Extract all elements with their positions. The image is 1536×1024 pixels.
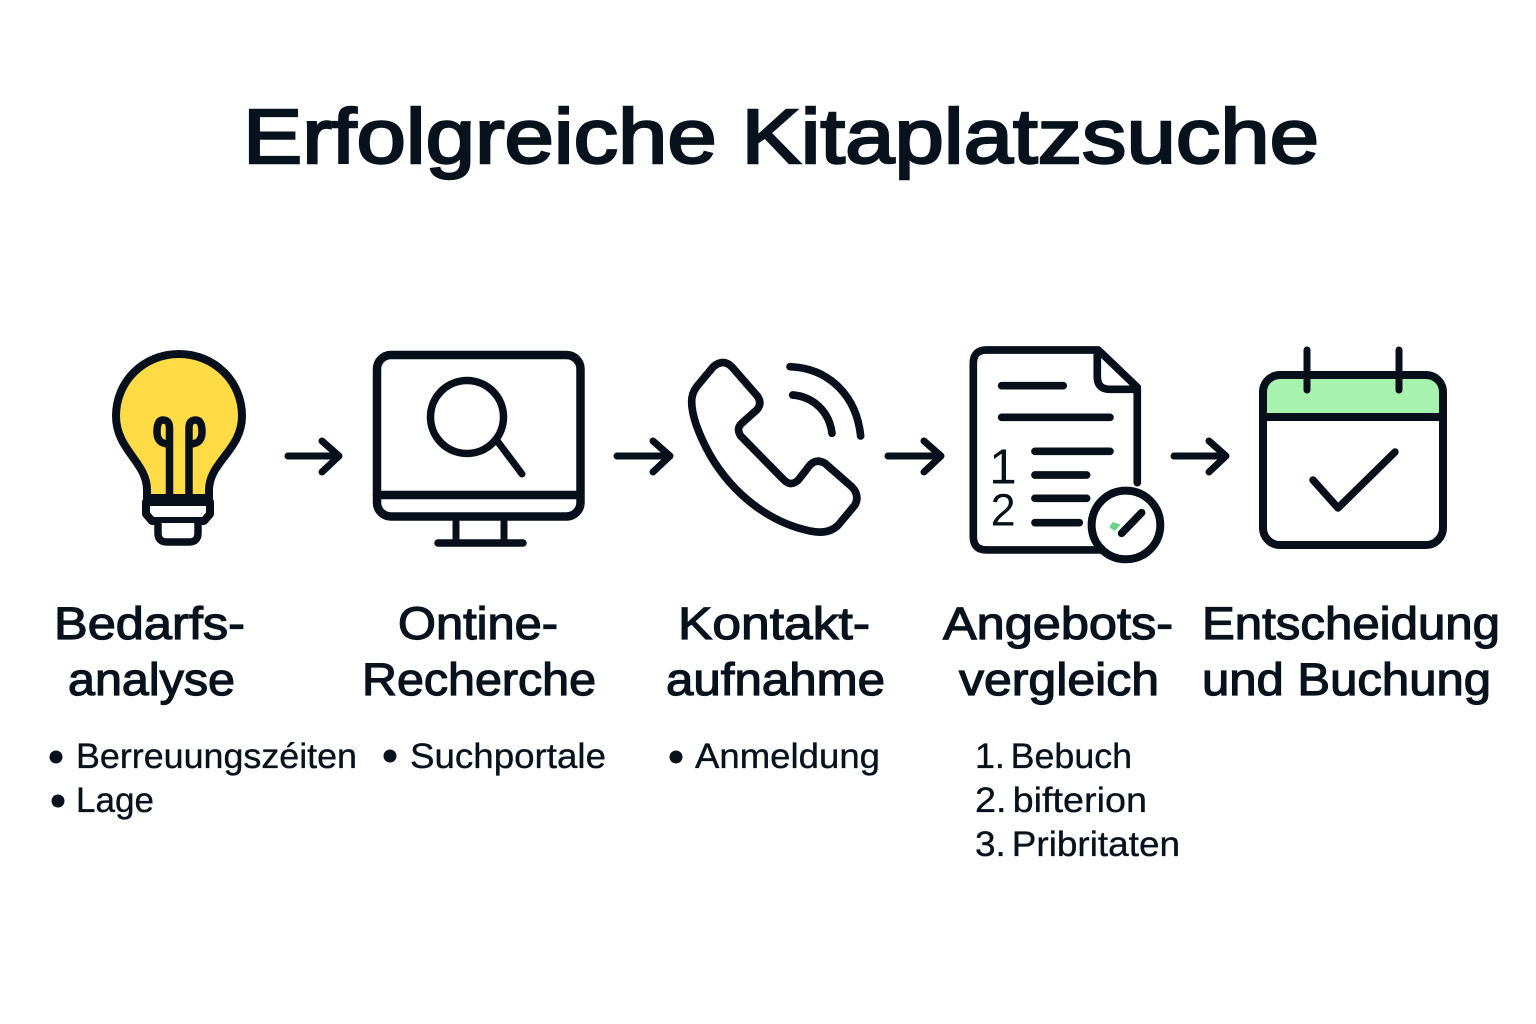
panel: step 2 Online-Recherche bbox=[362, 355, 606, 776]
icon: document with checkmark badge bbox=[973, 350, 1160, 559]
heading: Entscheidung und Buchung: Entscheidung bbox=[1202, 598, 1500, 649]
icon: document with checkmark badge: 1 bbox=[989, 439, 1017, 494]
heading: Angebotsvergleich: vergleich bbox=[959, 654, 1159, 705]
heading: Entscheidung und Buchung bbox=[1202, 598, 1500, 705]
arrow: step 1 to 2 bbox=[288, 441, 339, 472]
heading: Online-Recherche bbox=[362, 598, 596, 705]
panel: step 4 Angebotsvergleich bbox=[943, 350, 1180, 864]
arrow: step 4 to 5 bbox=[1174, 441, 1226, 472]
panel: step 3 Kontaktaufnahme bbox=[666, 362, 885, 776]
list: Bedarfsanalyse bullets: Berreuungszéiten bbox=[76, 737, 357, 776]
title: Erfolgreiche Kitaplatzsuche bbox=[243, 94, 1319, 180]
list: Online-Recherche bullet: Suchportale bbox=[410, 737, 606, 776]
list: Bedarfsanalyse bullets: Lage bbox=[76, 781, 154, 820]
heading: Bedarfsanalyse: Bedarfs- bbox=[54, 598, 245, 649]
heading: Online-Recherche: Ontine- bbox=[398, 598, 558, 649]
icon: phone with signal arcs bbox=[692, 362, 861, 532]
arrow: step 2 to 3 bbox=[617, 441, 670, 472]
heading: Kontaktaufnahme bbox=[666, 598, 885, 705]
list: Bedarfsanalyse bullets bbox=[50, 737, 357, 820]
list: Kontaktaufnahme bullet: Anmeldung bbox=[695, 737, 880, 776]
icon: light bulb bbox=[116, 354, 242, 542]
list: Angebotsvergleich numbered: 3. Pribritaten bbox=[975, 825, 1180, 864]
icon: calendar with check bbox=[1263, 350, 1443, 545]
panel: step 5 Entscheidung und Buchung bbox=[1202, 350, 1500, 705]
heading: Entscheidung und Buchung: und Buchung bbox=[1202, 654, 1491, 705]
heading: Kontaktaufnahme: aufnahme bbox=[666, 654, 885, 705]
icon: document with checkmark badge: 2 bbox=[991, 485, 1016, 536]
icon: monitor with magnifier bbox=[377, 355, 580, 543]
heading: Angebotsvergleich bbox=[943, 598, 1173, 705]
panel: step 1 Bedarfsanalyse bbox=[50, 354, 357, 820]
heading: Bedarfsanalyse bbox=[54, 598, 245, 705]
arrow: step 3 to 4 bbox=[888, 441, 941, 472]
list: Angebotsvergleich numbered: 2. bifterion bbox=[975, 781, 1147, 820]
heading: Kontaktaufnahme: Kontakt- bbox=[678, 598, 870, 649]
heading: Angebotsvergleich: Angebots- bbox=[943, 598, 1173, 649]
heading: Online-Recherche: Recherche bbox=[362, 654, 596, 705]
heading: Bedarfsanalyse: analyse bbox=[68, 654, 235, 705]
list: Angebotsvergleich numbered bbox=[975, 737, 1180, 864]
list: Angebotsvergleich numbered: 1. Bebuch bbox=[975, 737, 1132, 776]
